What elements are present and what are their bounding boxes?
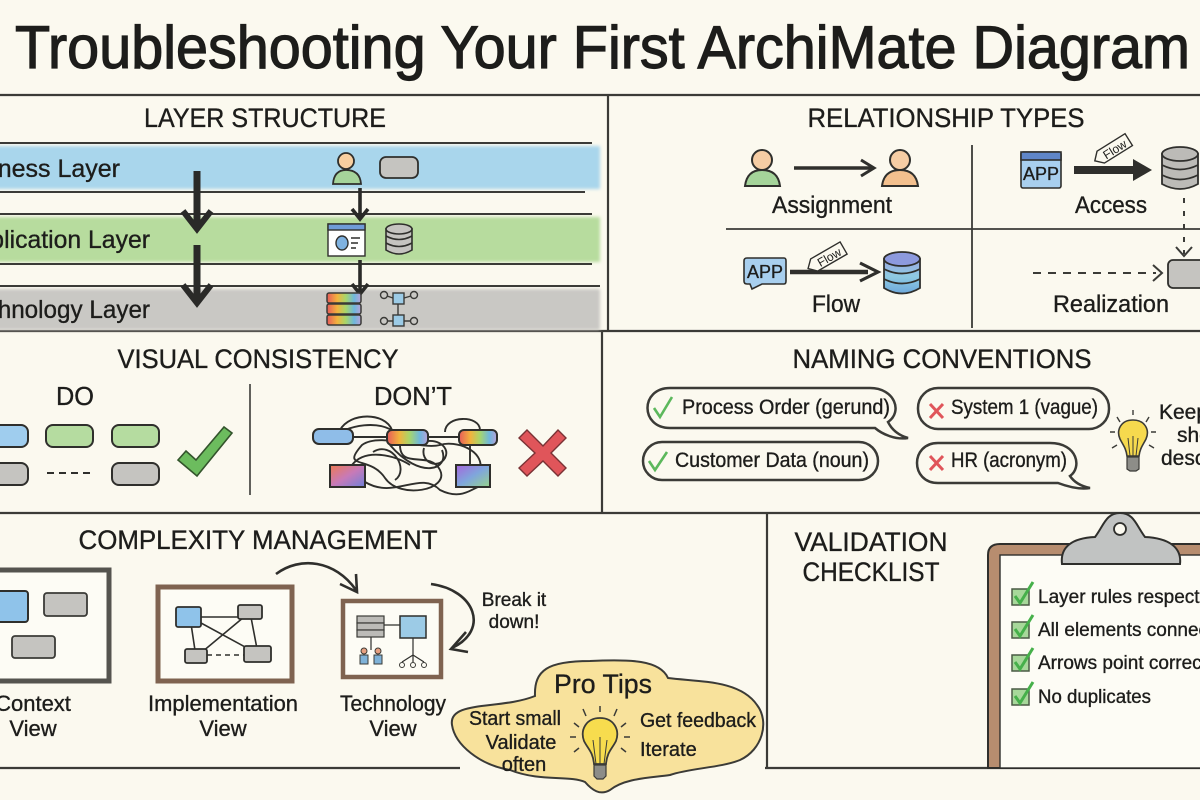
bubble: system 1: System 1 (vague) [951,396,1098,419]
heading: validation checklist: CHECKLIST [802,557,940,587]
band: business layer [0,143,600,192]
icon: application window [328,224,365,256]
bubble: process order: Process Order (gerund) [682,396,890,419]
flow relationship: Flow [812,291,861,318]
icon: light bulb [1110,410,1156,471]
heading: layer structure: LAYER STRUCTURE [144,103,386,133]
note: break it down: Break it [482,590,547,611]
band: technology layer [0,286,600,330]
band: application layer [0,214,600,264]
heading: visual consistency: VISUAL CONSISTENCY [118,344,398,374]
bubble: customer data: Customer Data (noun) [675,449,869,472]
flow relationship [744,242,920,318]
checklist items: No duplicates [1038,687,1151,708]
panel: complexity management [0,525,547,741]
clipboard clip [1062,513,1180,564]
arrow: business to application [183,171,211,229]
note: keep short descriptive [1159,401,1200,470]
panel: visual consistency [0,344,566,495]
realization relationship [1033,198,1200,318]
bubble: HR acronym [917,443,1090,489]
icon: network nodes [380,292,418,326]
callout: pro tips: Get feedback [640,710,757,732]
panel: relationship types [726,103,1200,328]
implementation view [148,587,298,741]
heading: relationship types: RELATIONSHIP TYPES [808,103,1084,133]
panel: naming conventions [643,344,1200,489]
icon: database [386,224,412,254]
arrow: application down [352,260,368,294]
arrow: break it down [431,584,474,652]
callout: pro tips: Start small [469,708,561,730]
icon: business actor [333,153,361,184]
technology view: View [369,716,417,741]
flow relationship: Flow [815,245,844,270]
callout: pro tips [452,660,763,792]
access relationship: Flow [1100,137,1130,162]
technology view [340,601,446,741]
dont example [313,381,566,494]
access relationship: APP [1023,164,1059,184]
do example: DO [56,381,94,411]
access relationship: Access [1075,192,1147,219]
bubble: customer data [643,442,878,480]
bubble: process order [648,388,908,438]
implementation view: Implementation [148,691,298,716]
context view: View [9,716,57,741]
dont example: DON’T [374,381,452,411]
assignment relationship [745,150,918,219]
arrow: actor down [352,188,368,219]
context view [0,570,109,741]
technology view: Technology [340,691,446,716]
heading: validation checklist [794,527,948,587]
access relationship [1021,134,1198,219]
icon: grey process box [380,157,418,178]
heading: complexity management: COMPLEXITY MANAGEMENT [78,525,438,555]
assignment relationship: Assignment [772,192,892,219]
implementation view: View [199,716,247,741]
note: break it down: down! [489,612,539,633]
icon: red cross [519,430,566,476]
callout: pro tips: Validate [486,732,556,754]
note: break it down [482,590,547,633]
panel: layer structure [0,103,600,330]
icon: green check [178,427,232,476]
checklist items [1012,582,1200,708]
callout: pro tips: often [502,754,546,776]
clipboard [988,513,1200,768]
callout: pro tips: Iterate [640,739,697,761]
panel: validation checklist [794,513,1200,768]
arrow: application to technology [183,245,211,303]
bubble: system 1 [918,388,1109,429]
do example [0,381,232,485]
flow relationship: APP [747,262,783,282]
heading: naming conventions: NAMING CONVENTIONS [792,344,1092,374]
bubble: HR acronym: HR (acronym) [951,449,1067,472]
arrow: implementation to technology [276,563,357,592]
callout: pro tips: Pro Tips [554,669,652,699]
icon: server rack [327,293,361,325]
heading: validation checklist: VALIDATION [794,527,948,557]
realization relationship: Realization [1053,291,1169,318]
icon: pro tips bulb [570,706,630,779]
